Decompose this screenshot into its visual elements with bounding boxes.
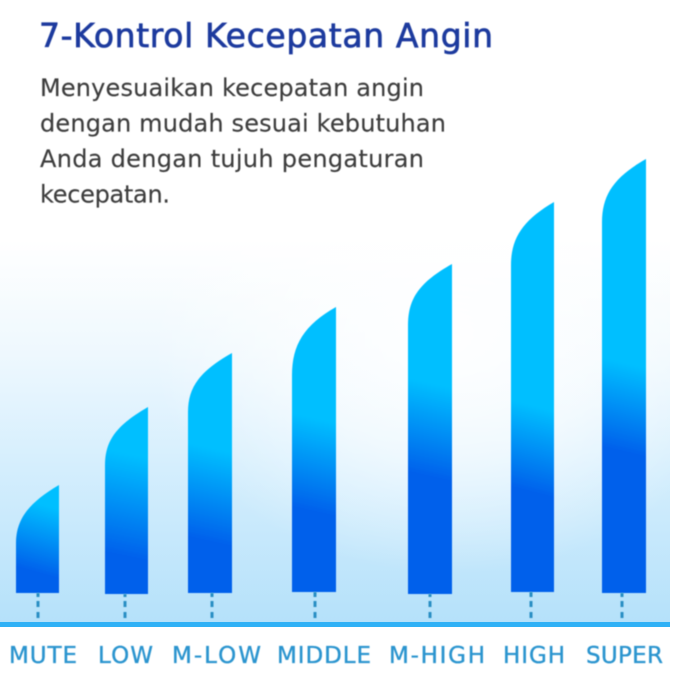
speed labels: MIDDLE [277,643,371,669]
baseline [0,622,670,627]
speed labels: LOW [98,643,153,669]
dashed connector lines [38,592,622,618]
bar: M-HIGH [408,264,452,594]
description text: Anda dengan tujuh pengaturan [40,145,424,173]
speed labels: HIGH [503,643,565,669]
description text: Menyesuaikan kecepatan angin [40,74,424,102]
description text: kecepatan. [40,180,170,208]
speed labels: M-HIGH [389,643,485,669]
bar chart: seven wind speeds [16,159,646,594]
speed labels: MUTE [9,643,77,669]
speed labels: M-LOW [172,643,261,669]
bar: MIDDLE [292,307,336,592]
chart background panel [0,240,670,623]
bar: HIGH [511,202,554,592]
bar: MUTE [16,485,59,593]
title: 7-Kontrol Kecepatan Angin [39,16,493,55]
bar: SUPER [602,159,646,593]
bar: M-LOW [188,353,232,593]
speed labels: SUPER [586,643,663,669]
description text [40,74,446,208]
speed labels [9,643,663,669]
bar: LOW [105,407,148,594]
description text: dengan mudah sesuai kebutuhan [40,110,446,138]
